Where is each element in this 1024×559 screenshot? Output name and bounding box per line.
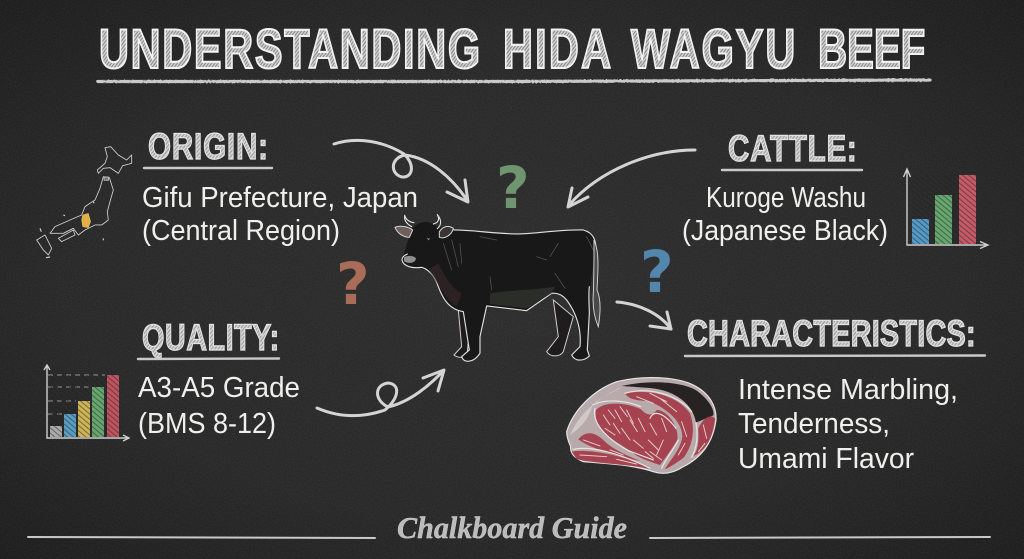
title underline: [98, 80, 930, 82]
arrow: origin to cow: [334, 140, 468, 202]
question mark: red: ?: [336, 250, 370, 318]
title: WAGYU: [631, 18, 795, 81]
quality heading: QUALITY:: [142, 318, 279, 359]
central cow illustration: [395, 215, 600, 361]
characteristics text: Umami Flavor: [738, 443, 914, 475]
cattle heading: CATTLE:: [728, 129, 857, 170]
arrow: cow to characteristics: [617, 302, 671, 329]
arrow: quality to cow: [317, 370, 444, 416]
chart: cattle bars: [904, 169, 988, 248]
panel: quality: [44, 318, 300, 441]
characteristics underline: [685, 354, 985, 357]
characteristics text: Intense Marbling,: [738, 374, 958, 406]
quality text: (BMS 8-12): [138, 408, 276, 440]
question mark: blue: ?: [640, 238, 674, 306]
characteristics text: Tenderness,: [738, 408, 890, 440]
chart: quality grades bars: [44, 365, 129, 441]
footer left line: [28, 537, 375, 538]
origin text: (Central Region): [142, 215, 340, 247]
footer label: Chalkboard Guide: [397, 510, 627, 545]
panel: cattle: [682, 129, 988, 248]
panel: origin: [37, 127, 418, 258]
cow tail: [593, 240, 600, 327]
icon: map of Japan: [37, 147, 132, 258]
origin heading: ORIGIN:: [148, 127, 268, 168]
origin underline: [144, 167, 272, 169]
cow shading: [443, 237, 593, 290]
title: HIDA: [503, 18, 611, 81]
title: UNDERSTANDING: [99, 18, 480, 81]
far legs: [454, 300, 573, 357]
icon: marbled wagyu steak: [567, 378, 716, 473]
cow muzzle and eye: [404, 238, 430, 263]
question mark: green: ?: [496, 154, 530, 222]
cattle underline: [722, 169, 862, 171]
arrow: cattle to cow: [568, 150, 695, 207]
cow body: [402, 222, 595, 361]
cattle text: Kuroge Washu: [706, 182, 866, 214]
cattle text: (Japanese Black): [682, 215, 888, 247]
quality underline: [138, 357, 279, 360]
title: [99, 18, 925, 81]
footer right line: [650, 537, 990, 538]
title: BEEF: [818, 19, 925, 81]
cow outline: [402, 230, 596, 361]
characteristics heading: CHARACTERISTICS:: [687, 314, 976, 355]
quality text: A3-A5 Grade: [138, 372, 300, 404]
origin text: Gifu Prefecture, Japan: [142, 182, 418, 214]
cow ears and horns: [395, 215, 453, 238]
panel: characteristics: [567, 314, 985, 475]
